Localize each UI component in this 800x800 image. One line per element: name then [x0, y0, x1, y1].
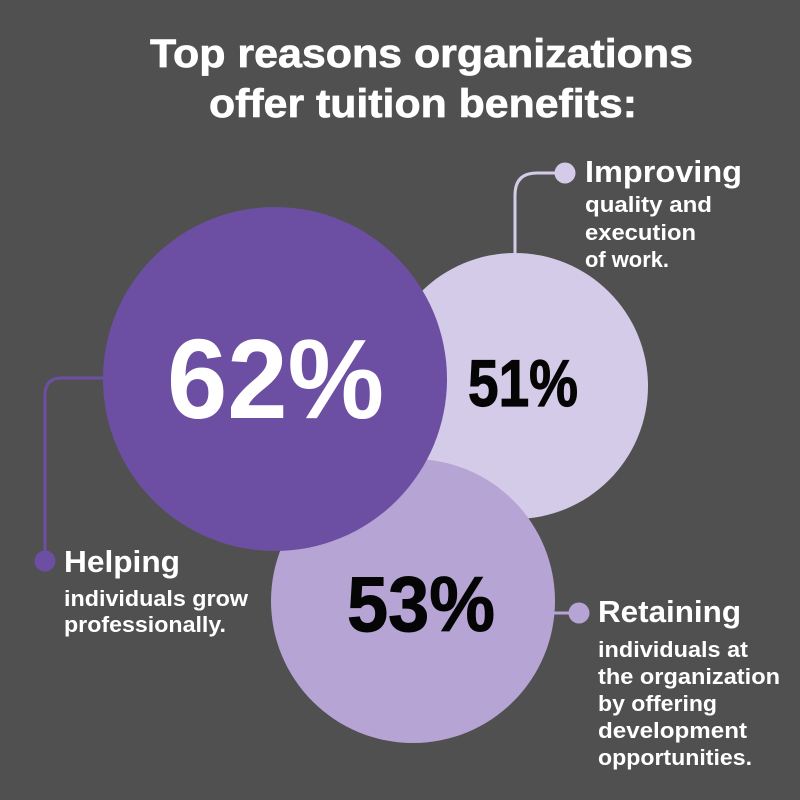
connector: improving: [515, 162, 576, 256]
title: Top reasons organizations: [150, 32, 693, 76]
circle: 51%: 51%: [468, 346, 578, 420]
text block: retaining: opportunities.: [598, 745, 752, 770]
text block: helping: individuals grow: [64, 586, 249, 611]
title: [150, 32, 693, 126]
text block: improving: execution: [585, 220, 696, 245]
text block: improving: of work.: [585, 247, 669, 272]
text block: helping: Helping: [64, 544, 180, 579]
text block: improving: quality and: [585, 192, 712, 217]
circle: 51%: [382, 253, 648, 519]
circle: 62%: 62%: [167, 316, 384, 442]
text block: retaining: Retaining: [598, 594, 741, 629]
text block: helping: [64, 544, 249, 637]
text block: retaining: the organization: [598, 664, 780, 689]
text block: retaining: development: [598, 718, 748, 743]
text block: retaining: by offering: [598, 691, 717, 716]
text block: helping: professionally.: [64, 612, 226, 637]
circle: 53%: 53%: [347, 560, 495, 648]
text block: retaining: individuals at: [598, 637, 749, 662]
connector: retaining: [553, 602, 590, 624]
circle: 62%: [103, 207, 447, 551]
text block: improving: [585, 154, 742, 272]
circle: 53%: [271, 459, 555, 743]
text block: retaining: [598, 594, 780, 770]
connector: helping: [34, 378, 105, 572]
text block: improving: Improving: [585, 154, 742, 189]
title: offer tuition benefits:: [209, 82, 637, 126]
